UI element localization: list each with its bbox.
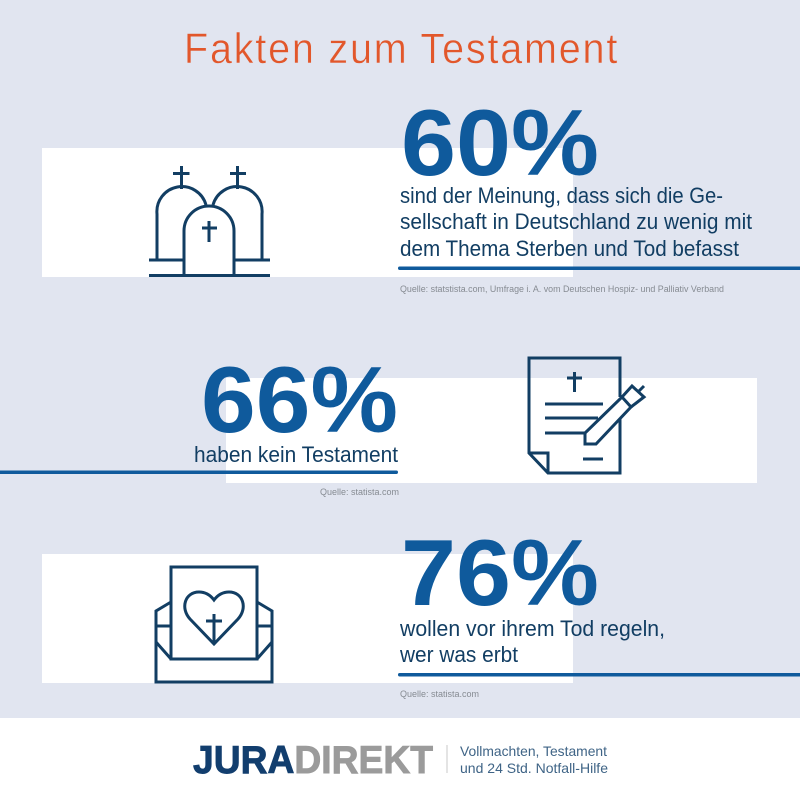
text: 60 percent description: dem Thema Sterben und Tod befasst xyxy=(400,236,739,261)
logo: Juradirekt: JURADIREKT xyxy=(193,739,433,782)
statistic: 76%: 76% xyxy=(401,520,599,625)
panel: 76 percent xyxy=(42,520,800,699)
title: Fakten zum Testament xyxy=(184,24,618,72)
source: 60 percent: Quelle: statstista.com, Umfrage i. A. vom Deutschen Hospiz- und Palliativ Verband xyxy=(400,284,724,294)
text: 66 percent description: haben kein Testament xyxy=(194,442,398,467)
panel: 66 percent xyxy=(0,347,757,497)
tagline: und 24 Std. Notfall-Hilfe xyxy=(460,760,608,776)
statistic: 60%: 60% xyxy=(401,90,599,195)
panel: 60 percent xyxy=(42,90,800,294)
text: 76 percent description: wollen vor ihrem Tod regeln, xyxy=(399,616,665,641)
icon: gravestones xyxy=(149,166,270,276)
statistic: 66%: 66% xyxy=(201,347,398,452)
rule: 76 percent xyxy=(398,673,800,676)
text: 60 percent description: sind der Meinung, dass sich die Ge- xyxy=(400,183,723,208)
text: 60 percent description xyxy=(400,183,752,261)
rule: 66 percent xyxy=(0,470,398,474)
text: 60 percent description: sellschaft in Deutschland zu wenig mit xyxy=(400,209,752,234)
rule: 60 percent xyxy=(398,266,800,270)
source: 66 percent: Quelle: statista.com xyxy=(320,487,399,497)
text: 76 percent description: wer was erbt xyxy=(399,642,518,667)
icon: testament document with pen xyxy=(529,358,644,473)
text: 76 percent description xyxy=(399,616,665,667)
icon: envelope with heart letter xyxy=(156,567,272,682)
source: 76 percent: Quelle: statista.com xyxy=(400,689,479,699)
tagline: Vollmachten, Testament xyxy=(460,743,607,759)
tagline xyxy=(460,743,608,776)
footer xyxy=(0,718,800,800)
